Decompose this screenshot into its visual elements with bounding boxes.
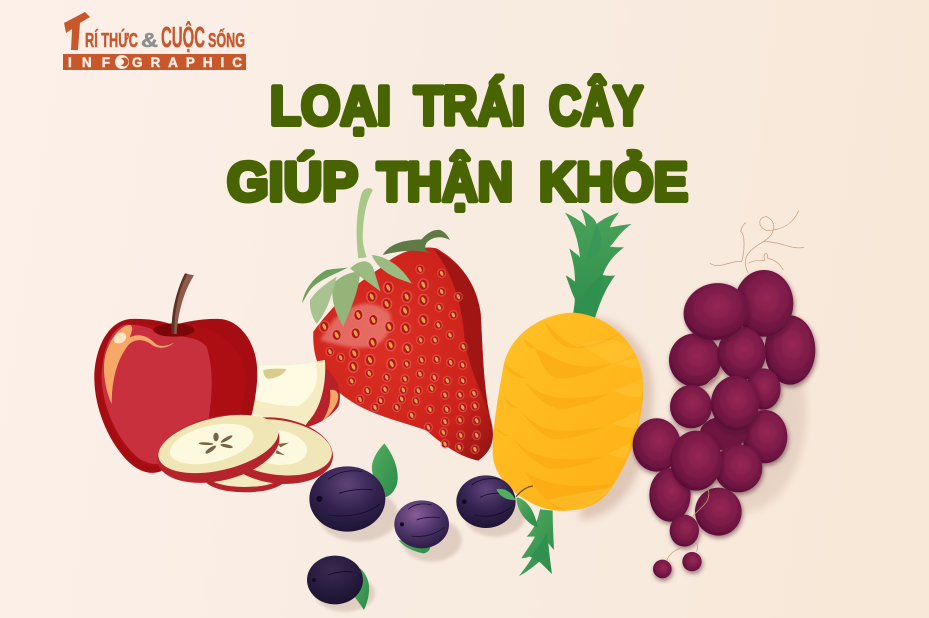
strawberry body [313,247,493,461]
grape bunch [633,270,815,578]
apple stem [172,273,194,334]
plum stem and leaves on pineapple [496,486,538,527]
grape stems [667,372,723,561]
title [227,74,688,212]
title: THẬN [377,150,513,212]
apple body [94,273,257,473]
strawberry calyx [302,230,450,327]
plum: middle [394,500,449,548]
strawberry [302,188,493,461]
logo band: infographic: INF [68,55,110,70]
apple wedge [252,360,340,428]
logo band: infographic [63,54,246,70]
apple slices [150,403,337,494]
title: CÂY [549,74,643,136]
logo band: infographic: GRAPHIC [132,55,242,70]
grape tendrils [710,211,804,273]
logo wordmark: RÍ THỨC [85,28,138,52]
pineapple crown [565,208,632,323]
grapes [633,211,815,578]
strawberry seeds [319,264,481,454]
title: KHỎE [539,150,688,212]
plum leaves [352,443,430,610]
pineapple shadow [580,316,654,520]
title: TRÁI [414,74,525,136]
plum: large [309,466,385,532]
pineapple scale shading [495,320,620,511]
logo: Tri Thuc & Cuoc Song Infographic [63,12,246,70]
grape shadow [673,313,807,513]
apple highlight [104,325,174,404]
plum shadows [315,488,525,612]
plum: right [456,475,516,528]
title: GIÚP [227,150,358,212]
strawberry stem [357,188,373,258]
title: LOẠI [270,74,391,136]
pineapple [493,208,654,520]
logo icon: T mark [64,12,90,50]
apple group [94,273,340,494]
plum: bottom [307,556,363,604]
logo wordmark: SỐNG [208,28,245,52]
apple seeds [199,433,233,455]
pineapple bottom leaves [519,509,554,576]
pineapple body [493,313,643,511]
logo wordmark [85,20,245,54]
plums [307,443,538,612]
logo wordmark: & [141,30,158,52]
logo wordmark: CUỘC [161,20,205,54]
